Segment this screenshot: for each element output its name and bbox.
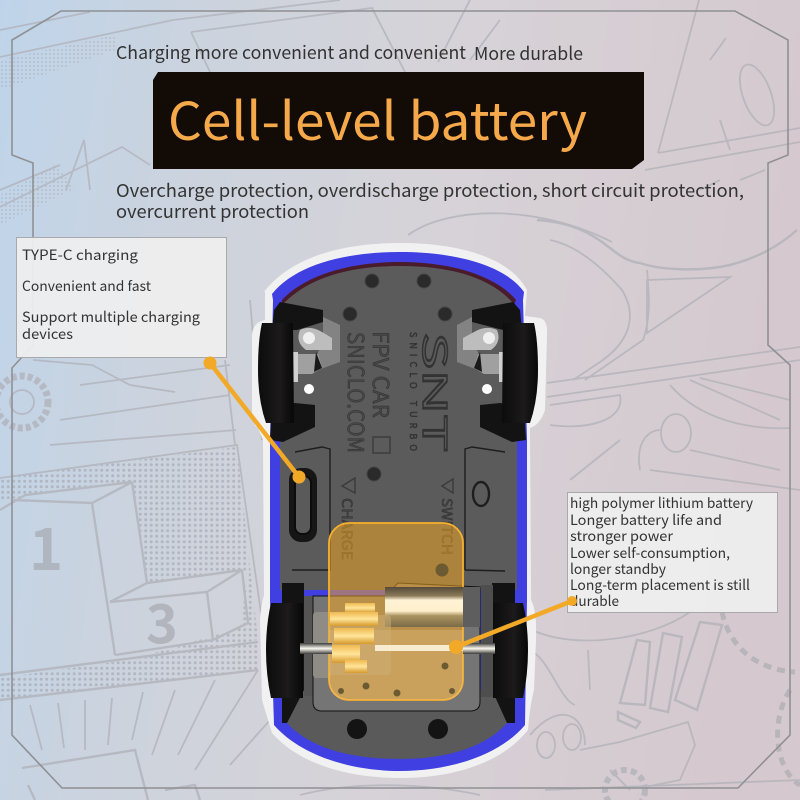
chassis lettering: CHARGE bbox=[337, 498, 357, 560]
background podium numbers: 3 bbox=[146, 580, 178, 659]
callout: polymer battery bbox=[568, 492, 778, 612]
callout: type-c charging: Support multiple charging bbox=[22, 307, 200, 327]
motor cylinder bbox=[385, 587, 463, 627]
left gearbox collar bbox=[313, 612, 331, 678]
front wheel wells bbox=[270, 302, 526, 442]
callout: polymer battery: Longer battery life and bbox=[570, 510, 722, 530]
title banner bbox=[153, 72, 644, 169]
chassis screw holes bbox=[343, 274, 452, 481]
rear wheels bbox=[266, 603, 528, 698]
chassis lettering: SWITCH bbox=[437, 498, 457, 555]
callout: polymer battery: longer standby bbox=[570, 559, 667, 579]
callout: type-c charging: Convenient and fast bbox=[22, 276, 152, 296]
background podium numbers bbox=[29, 503, 178, 659]
callout: type-c charging bbox=[16, 238, 226, 358]
icon: USB-C port bbox=[289, 468, 317, 542]
front wheels bbox=[258, 323, 538, 423]
chassis lettering: SNT bbox=[413, 332, 461, 452]
callout: polymer battery: stronger power bbox=[570, 526, 674, 546]
chassis lettering: SNICLO TURBO bbox=[407, 332, 420, 451]
motor end outside overlay bbox=[463, 587, 480, 627]
chassis lettering bbox=[337, 331, 461, 560]
protection description bbox=[116, 177, 744, 224]
arrow: type-c callout leader bbox=[204, 356, 306, 484]
subtitle line: More durable bbox=[474, 40, 583, 66]
title banner: Cell-level battery bbox=[168, 80, 587, 155]
callout: polymer battery: high polymer lithium battery bbox=[570, 493, 754, 513]
callout: polymer battery: durable bbox=[570, 591, 619, 611]
rear chassis and gearbox bbox=[282, 583, 515, 759]
lit lower section of overlay bbox=[329, 630, 463, 700]
protection description: overcurrent protection bbox=[116, 198, 309, 224]
front suspension plates bbox=[293, 317, 504, 394]
chassis lettering: SNICLO.COM bbox=[341, 332, 373, 453]
callout: polymer battery: Lower self-consumption, bbox=[570, 543, 730, 563]
subtitle line: Charging more convenient and convenient bbox=[116, 39, 466, 65]
callout: polymer battery: Long-term placement is still bbox=[570, 575, 750, 595]
axle bbox=[300, 643, 495, 654]
callout: type-c charging: devices bbox=[22, 324, 73, 344]
background podium numbers: 1 bbox=[29, 503, 63, 587]
blue car body bbox=[270, 252, 527, 771]
gear housing bbox=[329, 615, 391, 675]
protection description: Overcharge protection, overdischarge protection, short circuit protection, bbox=[116, 177, 744, 203]
chassis lettering: FPV CAR bbox=[366, 331, 398, 418]
callout: type-c charging: TYPE-C charging bbox=[22, 245, 138, 265]
arrow: battery callout leader bbox=[449, 596, 577, 654]
brass gears bbox=[330, 603, 378, 673]
car underside illustration bbox=[252, 243, 547, 778]
side panels bbox=[292, 447, 505, 571]
chassis plate bbox=[280, 266, 517, 590]
overlay screw holes bbox=[338, 564, 455, 696]
battery highlight overlay bbox=[329, 523, 463, 700]
sticker outline bbox=[252, 243, 547, 778]
